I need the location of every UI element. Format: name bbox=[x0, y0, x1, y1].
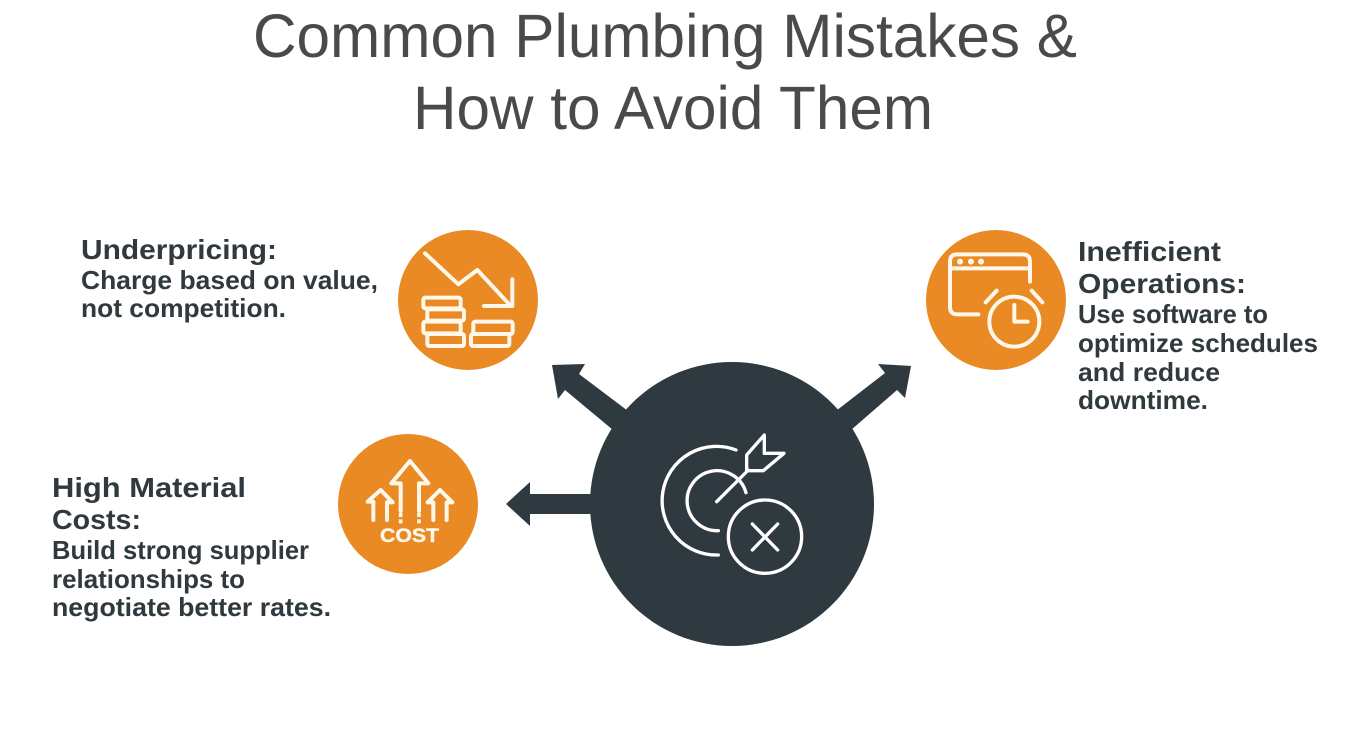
central hub with arrows bbox=[506, 362, 911, 646]
text block: inefficient operations: Inefficient bbox=[1078, 236, 1221, 267]
icon: browser window and clock bbox=[950, 254, 1042, 347]
text block: high material costs: Build strong supplier bbox=[52, 535, 309, 565]
text block: inefficient operations: Use software to bbox=[1078, 299, 1268, 329]
text block: underpricing: Underpricing: bbox=[81, 234, 277, 265]
text block: underpricing bbox=[81, 234, 378, 323]
panel: inefficient operations icon bbox=[926, 230, 1066, 370]
icon: falling chart and coins bbox=[423, 253, 513, 346]
text block: high material costs: High Material bbox=[52, 472, 246, 503]
arrow: to High Material Costs bbox=[506, 482, 595, 526]
text block: high material costs: negotiate better rates. bbox=[52, 592, 331, 622]
text block: inefficient operations bbox=[1078, 236, 1318, 415]
text block: inefficient operations: optimize schedules bbox=[1078, 328, 1318, 358]
text block: high material costs: relationships to bbox=[52, 564, 245, 594]
panel: high material costs icon bbox=[338, 434, 478, 574]
icon: target with arrow and cross bbox=[662, 435, 802, 573]
text block: high material costs bbox=[52, 472, 331, 622]
title: Common Plumbing Mistakes & bbox=[253, 2, 1077, 70]
label: COST: COST bbox=[380, 526, 439, 547]
arrow: to Inefficient Operations bbox=[832, 364, 911, 430]
text block: inefficient operations: Operations: bbox=[1078, 268, 1246, 299]
icon: rising cost arrows bbox=[368, 461, 452, 523]
text block: underpricing: Charge based on value, bbox=[81, 265, 378, 295]
central dark circle bbox=[590, 362, 874, 646]
panel: underpricing icon bbox=[398, 230, 538, 370]
title: How to Avoid Them bbox=[413, 74, 933, 142]
arrow: to Underpricing bbox=[552, 364, 632, 430]
title bbox=[253, 2, 1077, 142]
text block: high material costs: Costs: bbox=[52, 504, 141, 535]
text block: underpricing: not competition. bbox=[81, 293, 286, 323]
text block: inefficient operations: and reduce bbox=[1078, 357, 1220, 387]
text block: inefficient operations: downtime. bbox=[1078, 385, 1208, 415]
